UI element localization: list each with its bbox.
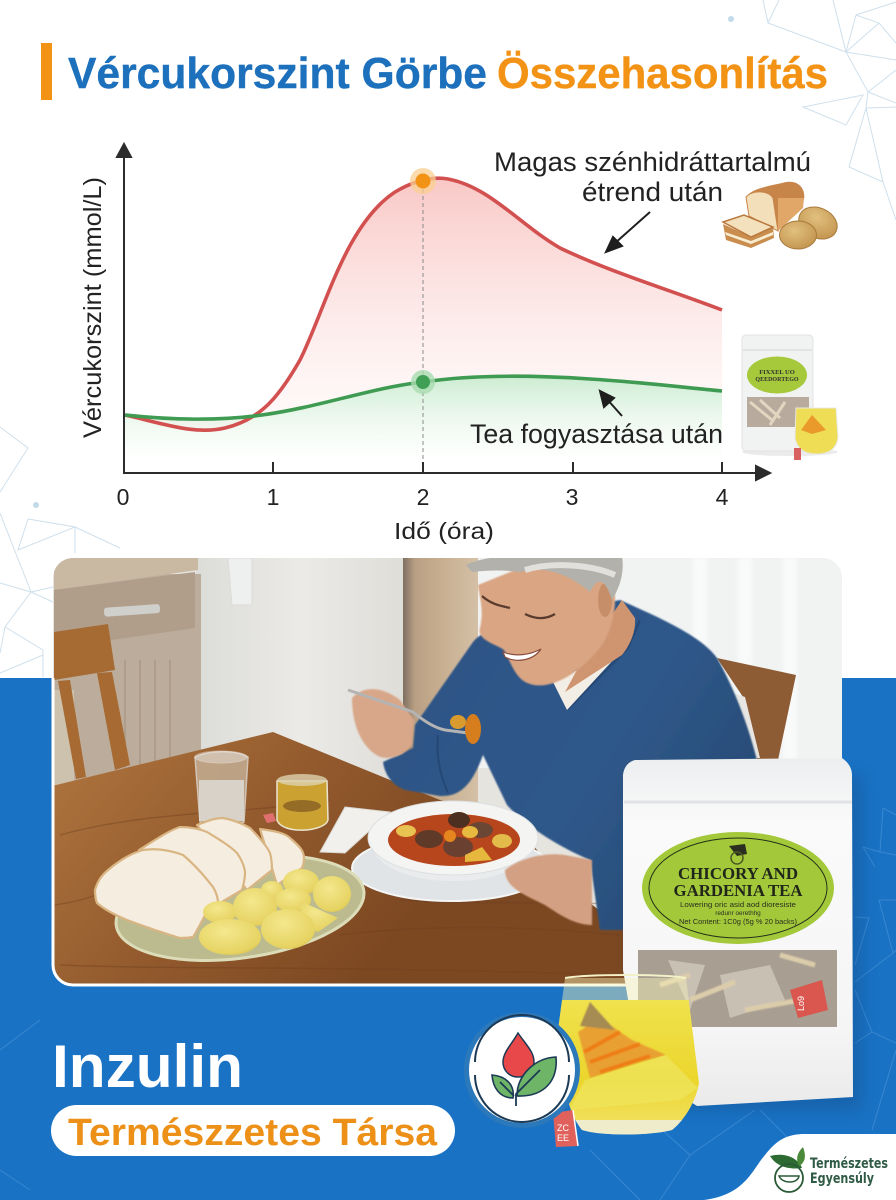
icon: small tea package with glass: QEEDORTEGO [755,377,799,383]
blue lower band [0,678,896,1200]
man: undershirt [553,662,612,710]
water glass [195,751,248,825]
blood drop [503,1033,534,1077]
title blue part: Vércukorszint Görbe [68,49,487,98]
y axis arrow [117,144,131,473]
x tick labels: 4 [716,484,729,510]
label: after tea: Tea fogyasztása után [470,419,723,449]
room background [53,570,598,909]
peak guide line [422,182,424,473]
icon: small tea package with glass: FIXXEL UO [759,369,795,376]
package label: Net Content: 1C0g (5g % 20 backs) [679,917,797,926]
x tick labels: 0 [117,484,129,510]
package label: redunr oerethhg [715,910,761,917]
x axis title: Idő (óra) [394,518,494,544]
x tick labels: 1 [267,484,279,510]
red curve: high carb diet [125,178,722,430]
hand on bowl [505,854,592,925]
tea package [623,758,862,1110]
tea tag: EE [557,1133,569,1143]
brand corner with logo [704,1134,896,1200]
package window with tea bags: Lo9 [796,996,806,1011]
logo icon [770,1147,805,1192]
package label [642,832,834,944]
chair behind man [717,658,796,760]
arrow to green curve [600,391,622,416]
red peak marker [410,168,436,194]
man: hair [466,556,623,600]
chair at left [54,624,130,785]
package window with tea bags [638,950,837,1027]
fork with food [348,690,481,744]
big tea glass [555,975,705,1135]
package label: CHICORY AND [678,864,798,883]
small leaf [492,1075,513,1098]
label: high carb: étrend után [582,177,723,207]
curtain [403,558,478,813]
bread plate [114,856,366,962]
x tick labels: 2 [417,484,429,510]
label: high carb: Magas szénhidráttartalmú [494,147,811,177]
y axis title: Vércukorszint (mmol/L) [79,177,107,438]
tea tag: ZC [557,1123,569,1133]
man: hand holding fork [352,689,414,758]
area under green curve [125,376,722,470]
x ticks [273,462,722,473]
man: neck [565,600,635,692]
area under red curve [125,178,722,430]
package label: GARDENIA TEA [674,881,803,900]
soup bowl [368,801,538,881]
bread slices [95,818,304,938]
wall [196,558,212,750]
blood sugar line chart [79,144,811,544]
napkin [320,807,390,853]
x tick labels [117,484,729,510]
window right [478,558,843,768]
heading: Inzulin: Inzulin [52,1033,243,1100]
large leaf [517,1057,556,1096]
title [41,43,828,100]
potatoes [199,869,351,955]
green curve: after tea [125,376,722,419]
photo panel: man eating at table [52,556,843,990]
tea tag [553,1110,578,1147]
label: high carb [494,147,811,207]
table [52,732,640,990]
tea glass on table [263,774,328,830]
title accent bar [41,43,52,100]
arrow to red curve [606,212,650,252]
icon: bread and potatoes [723,182,842,249]
pill: Természzetes Társa: Természzetes Társa [68,1112,438,1154]
green marker [411,370,435,394]
photo white border [53,678,640,985]
cabinet [54,558,201,789]
title orange part: Összehasonlítás [497,49,828,98]
icon: blood drop and leaves badge [464,1012,580,1128]
label logo [729,844,747,856]
brand name: Egyensúly [810,1171,874,1187]
x tick labels: 3 [566,484,578,510]
geometric line pattern [0,0,896,677]
man: sweater torso and arm [383,600,757,930]
package label: Lowering oric asid aod dioresiste [680,900,796,909]
man: face [478,560,615,685]
x axis arrow [123,466,770,480]
brand name [810,1156,888,1187]
icon: small tea package with glass [742,335,838,460]
under plate [351,848,543,902]
